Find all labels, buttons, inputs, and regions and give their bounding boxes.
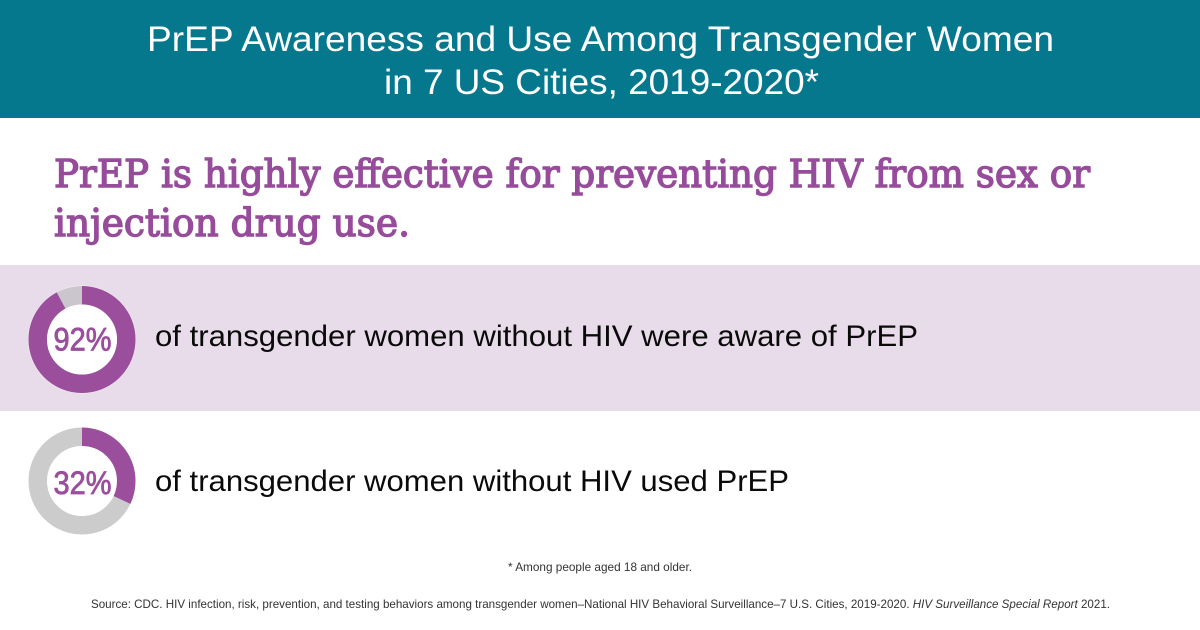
footnote: * Among people aged 18 and older.: [508, 560, 692, 574]
heading: PrEP effectiveness: injection drug use.: [54, 201, 410, 246]
source citation: Source: CDC. HIV infection, risk, prevention, and testing behaviors among transgender women–National HIV Behavioral Surveillance–7 U.S. Cities, 2019-2020. HIV Surveillance Special Report 2021.: [91, 597, 1110, 611]
text: use statistic: of transgender women without HIV used PrEP: [155, 465, 789, 498]
heading: PrEP effectiveness: PrEP is highly effective for preventing HIV from sex or: [54, 152, 1091, 197]
donut chart: 32%: 32%: [54, 465, 112, 501]
donut chart: 92%: 92%: [54, 322, 112, 358]
text: awareness statistic: of transgender women without HIV were aware of PrEP: [155, 320, 918, 353]
heading: PrEP effectiveness: [54, 152, 1091, 246]
donut chart: 32%: [38, 437, 126, 525]
title: PrEP Awareness and Use Among Transgender Women: [147, 20, 1054, 59]
panel: use row: [38, 437, 789, 525]
header banner: [0, 0, 1200, 118]
title: [147, 20, 1054, 102]
donut chart: 92%: [28, 286, 136, 394]
title: in 7 US Cities, 2019-2020*: [384, 63, 819, 102]
panel: awareness row: [0, 265, 1200, 411]
